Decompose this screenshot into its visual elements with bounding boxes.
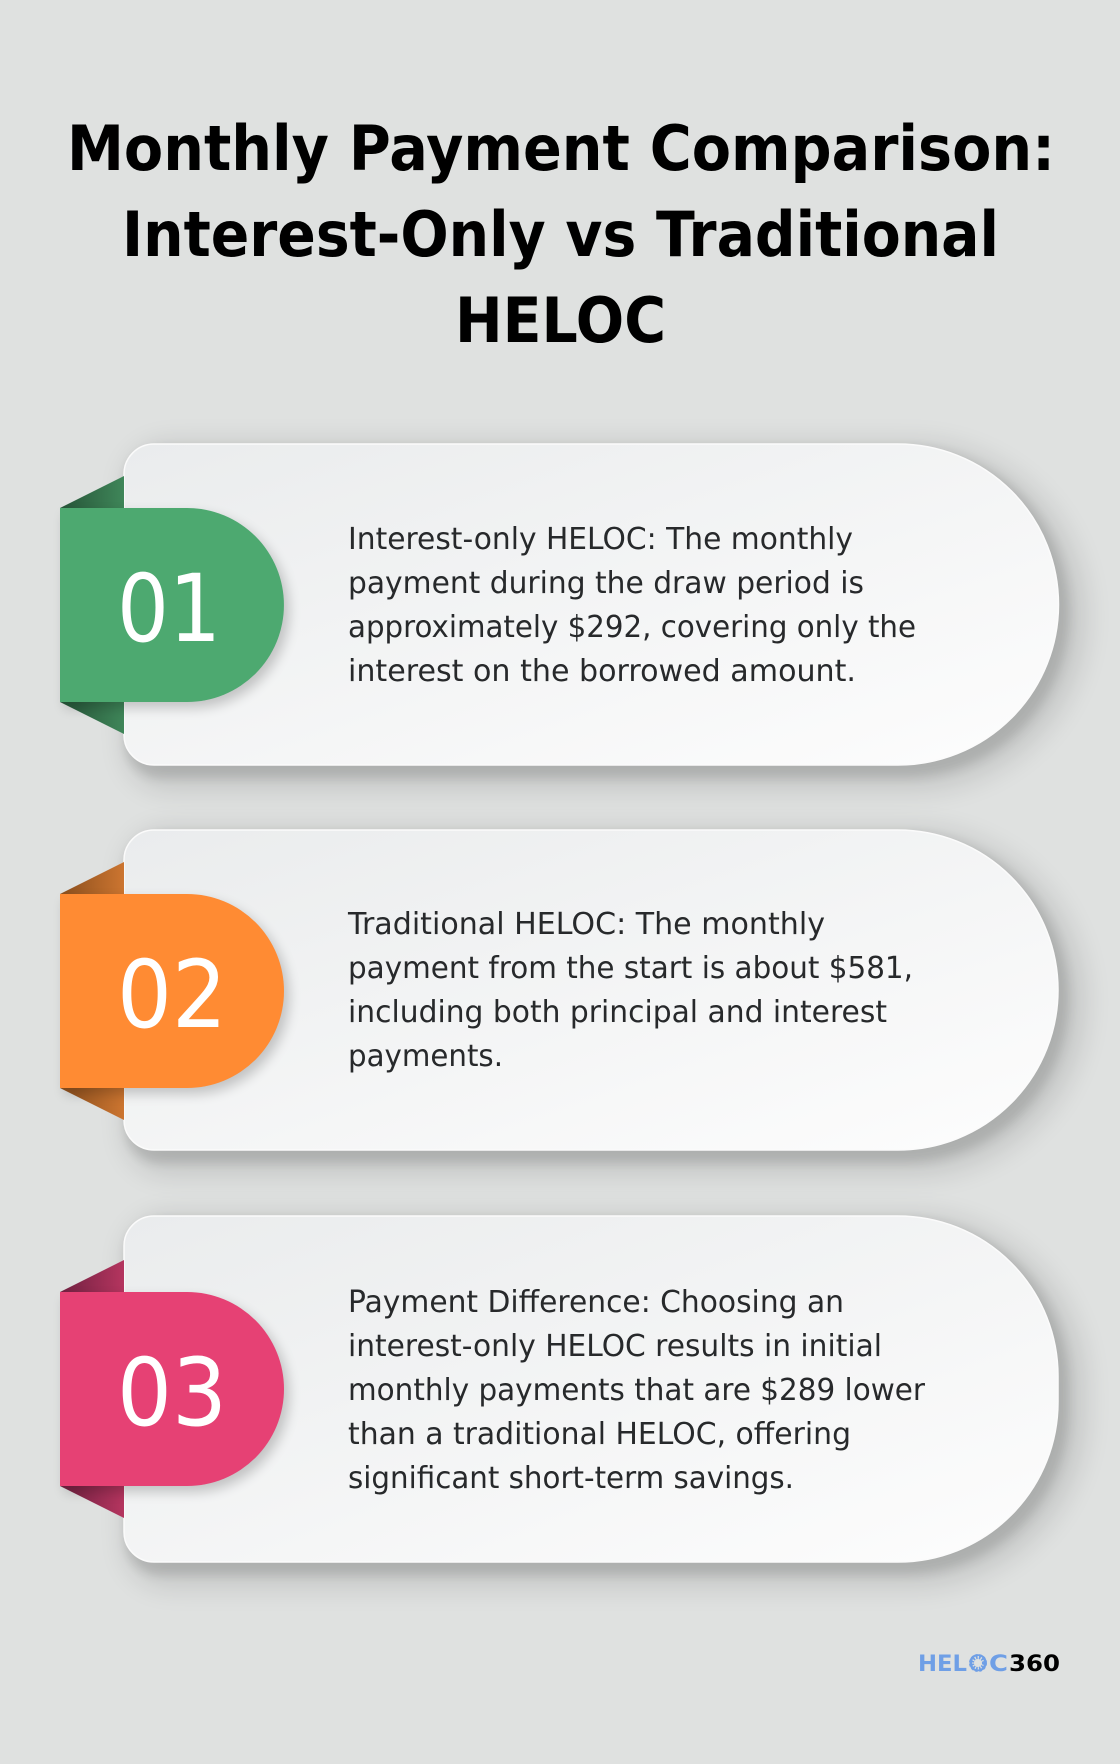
text block 03: interest-only HELOC results in initial: [348, 1329, 882, 1364]
card 1 surface: [124, 444, 1072, 777]
text block 03: significant short-term savings.: [348, 1461, 794, 1496]
badge 01 with folded ribbon: [60, 476, 289, 734]
badge 02 with folded ribbon: [60, 862, 289, 1120]
text block 01: approximately $292, covering only the: [348, 610, 916, 645]
text block 01: payment during the draw period is: [348, 566, 864, 601]
title: HELOC: [455, 284, 666, 357]
text block 02: payment from the start is about $581,: [348, 951, 913, 986]
panel: step 01 interest-only HELOC: [60, 444, 1072, 777]
text block 02: [347, 907, 913, 1074]
badge 01 with folded ribbon: 01: [117, 555, 221, 664]
text block 03: Payment Difference: Choosing an: [348, 1285, 844, 1320]
title: Monthly Payment Comparison:: [67, 112, 1055, 185]
title: [67, 112, 1055, 357]
text block 03: [348, 1285, 925, 1496]
text block 01: interest on the borrowed amount.: [348, 654, 856, 689]
card 2 surface: [124, 830, 1072, 1162]
logo: HELOC360: [918, 1652, 1060, 1677]
panel: step 02 traditional HELOC: [60, 830, 1072, 1162]
text block 02: Traditional HELOC: The monthly: [347, 907, 825, 942]
logo: HELOC360: 360: [1009, 1652, 1060, 1677]
text block 03: monthly payments that are $289 lower: [348, 1373, 925, 1408]
text block 03: than a traditional HELOC, offering: [348, 1417, 851, 1452]
logo: HELOC360: C: [989, 1652, 1008, 1677]
card 3 surface: [124, 1216, 1072, 1574]
text block 01: Interest-only HELOC: The monthly: [348, 522, 853, 557]
text block 02: including both principal and interest: [348, 995, 887, 1030]
badge 02 with folded ribbon: 02: [117, 941, 227, 1050]
text block 01: [348, 522, 916, 689]
title: Interest-Only vs Traditional: [122, 198, 999, 271]
text block 02: payments.: [348, 1039, 503, 1074]
logo: HELOC360: HEL: [918, 1652, 967, 1677]
badge 03 with folded ribbon: [60, 1260, 289, 1518]
badge 03 with folded ribbon: 03: [117, 1339, 227, 1448]
panel: step 03 payment difference: [60, 1216, 1072, 1574]
logo: HELOC360: O: [968, 1652, 988, 1677]
